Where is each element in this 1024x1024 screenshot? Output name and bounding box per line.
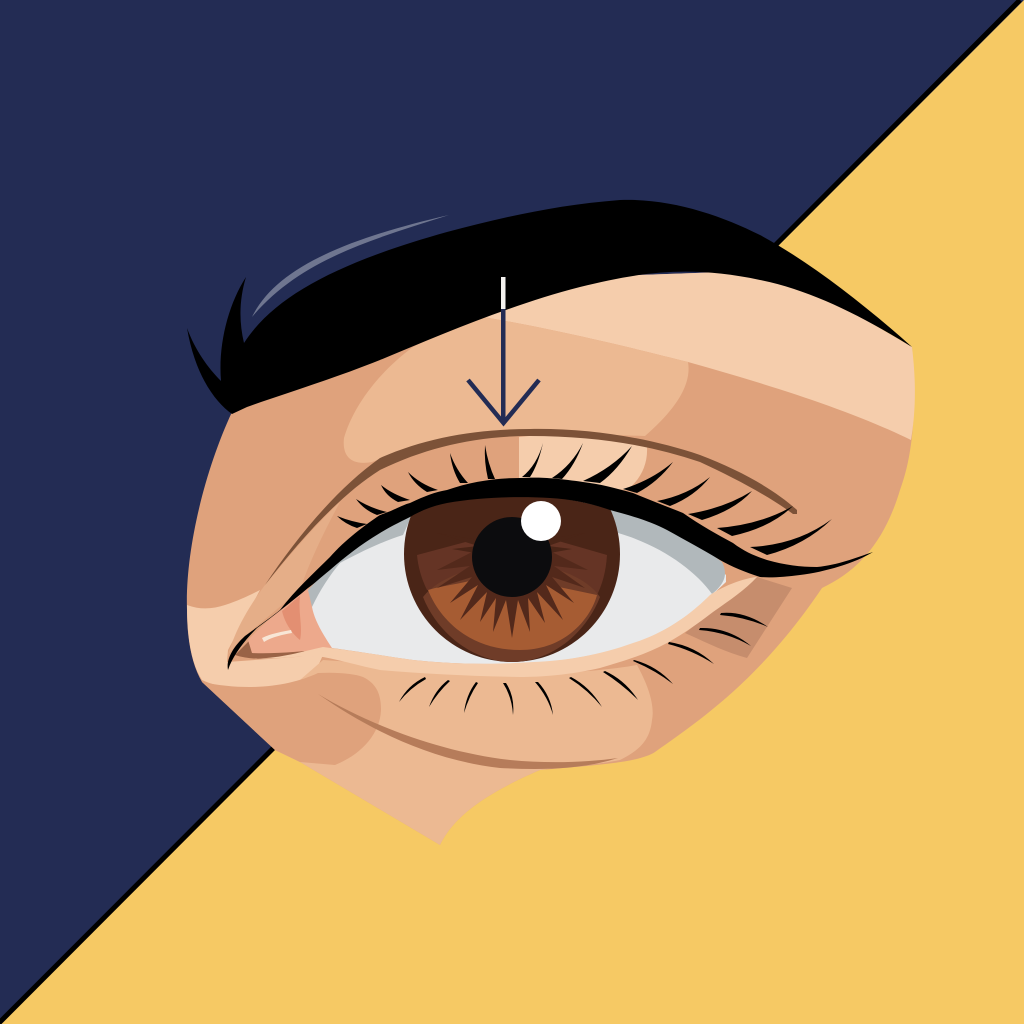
arrow shaft upper, white xyxy=(501,277,506,310)
sclera shadow right xyxy=(610,508,725,594)
arrow pointing down at eyelid xyxy=(468,277,539,423)
arrow shaft lower, navy xyxy=(501,309,506,422)
brow shape xyxy=(187,200,912,414)
skin base xyxy=(187,270,914,845)
upper eyeliner xyxy=(228,478,873,670)
catchlight xyxy=(521,501,561,541)
face skin xyxy=(187,270,915,845)
caruncle highlight xyxy=(262,630,292,642)
iris fibres lower xyxy=(437,552,588,638)
iris fibres upper xyxy=(453,540,571,552)
inner corner brown xyxy=(235,625,305,659)
lid base xyxy=(240,434,519,640)
outer-corner shadow patch xyxy=(685,577,792,658)
eyelid light patch xyxy=(518,434,647,490)
eye crease xyxy=(265,429,797,585)
sclera shadow left xyxy=(308,515,412,607)
lower lid rim xyxy=(250,577,757,677)
inner lid light wedge xyxy=(228,502,340,655)
eyebrow xyxy=(187,200,912,414)
inner corner flesh xyxy=(248,588,333,653)
arrow head xyxy=(468,380,539,423)
under-eye patch xyxy=(275,660,653,845)
iris upper field xyxy=(417,542,607,594)
iris lower light xyxy=(428,580,597,650)
eye xyxy=(228,478,873,677)
under-eye crease xyxy=(318,694,618,769)
lower lashes xyxy=(399,613,768,715)
nose corner highlight xyxy=(187,590,323,689)
sclera xyxy=(312,497,726,664)
upper lashes xyxy=(337,443,832,555)
pupil xyxy=(472,517,552,597)
brow highlight xyxy=(252,215,449,317)
iris rim xyxy=(404,497,620,662)
caruncle darker fold xyxy=(282,596,301,640)
light forehead band xyxy=(483,270,915,440)
iris xyxy=(404,497,620,662)
lower cheek shadow xyxy=(202,673,381,765)
iris lower rim xyxy=(423,572,600,662)
mid-tone brow patch xyxy=(344,317,689,463)
